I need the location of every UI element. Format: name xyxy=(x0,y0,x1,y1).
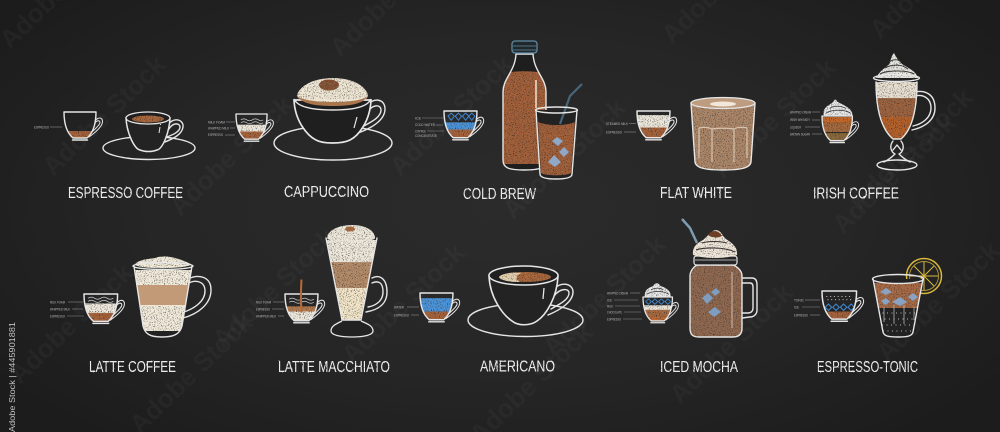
panel: cappuccino xyxy=(208,78,392,201)
icon: glass of cold brew with straw xyxy=(536,84,582,179)
legend: cold brew ingredients: ICE xyxy=(415,116,421,120)
icon: espresso-tonic glass xyxy=(870,274,926,337)
legend: latte macchiato ingredients xyxy=(256,300,284,318)
watermark: Adobe Stock tiled: Adobe Stock xyxy=(163,89,299,221)
watermark: Adobe Stock tiled: Adobe Stock xyxy=(36,49,172,181)
legend: espresso-tonic ingredients: ESPRESSO xyxy=(794,314,808,318)
icon: latte composition cup xyxy=(84,294,124,323)
legend: latte ingredients: WHIPPED MILK xyxy=(50,308,70,312)
legend: latte ingredients xyxy=(50,300,84,318)
icon: iced mocha composition cup xyxy=(643,283,678,323)
legend: iced mocha ingredients xyxy=(607,292,642,322)
legend: espresso-tonic ingredients: TONIC xyxy=(794,298,804,302)
icon: irish coffee glass xyxy=(870,53,935,170)
icon: cappuccino saucer and cup xyxy=(274,78,392,160)
panel: latte coffee xyxy=(50,256,211,376)
icon: irish coffee composition cup xyxy=(822,100,859,143)
legend: iced mocha ingredients: MILK xyxy=(607,304,613,308)
legend: espresso-tonic ingredients xyxy=(794,298,820,318)
panel: flat white xyxy=(606,98,755,202)
legend: espresso ingredients: ESPRESSO xyxy=(34,126,49,130)
icon: cappuccino composition cup xyxy=(236,114,273,141)
watermark: Adobe Stock tiled: Adobe Stock xyxy=(663,277,799,409)
legend: irish coffee ingredients: IRISH WHISKEY xyxy=(790,118,810,122)
label: Cappuccino: CAPPUCCINO xyxy=(284,184,369,201)
legend: americano ingredients xyxy=(394,306,419,318)
legend: flat white ingredients: ESPRESSO xyxy=(606,130,622,134)
icon: macchiato composition cup with pour xyxy=(285,280,325,323)
legend: iced mocha ingredients: WHIPPED CREAM xyxy=(607,292,628,296)
legend: cold brew ingredients xyxy=(415,116,444,138)
label: Latte Coffee: LATTE COFFEE xyxy=(89,359,176,376)
icon: americano composition cup xyxy=(420,293,460,322)
legend: irish coffee ingredients xyxy=(790,110,822,136)
legend: cold brew ingredients: COLD WATER xyxy=(415,123,435,127)
watermark: Adobe Stock tiled: Adobe Stock xyxy=(536,229,672,361)
watermark: Adobe Stock tiled: Adobe Stock xyxy=(335,237,471,369)
panel: iced mocha xyxy=(607,219,757,376)
panel: cold brew xyxy=(415,41,582,203)
watermark: Adobe Stock tiled: Adobe Stock xyxy=(496,92,632,224)
icon: latte macchiato tall glass xyxy=(320,225,387,337)
legend: iced mocha ingredients: ICE xyxy=(607,298,612,302)
legend: americano ingredients: WATER xyxy=(394,306,404,310)
legend: flat white ingredients: STEAMED MILK xyxy=(606,122,628,126)
label: Espresso Coffee: ESPRESSO COFFEE xyxy=(68,185,183,202)
legend: irish coffee ingredients: BROWN SUGAR xyxy=(790,132,810,136)
label: Iced Mocha: ICED MOCHA xyxy=(660,359,738,376)
legend: cappuccino ingredients: WHIPPED MILK xyxy=(208,126,229,130)
legend: flat white ingredients xyxy=(606,122,636,134)
legend: latte macchiato ingredients: MILK FOAM xyxy=(256,300,271,304)
icon: espresso-tonic composition cup xyxy=(822,291,864,321)
panel: espresso-tonic xyxy=(794,258,942,376)
watermark: Adobe Stock tiled: Adobe Stock xyxy=(843,82,979,214)
label: Irish Coffee: IRISH COFFEE xyxy=(813,186,899,202)
legend: espresso-tonic ingredients: ICE xyxy=(794,306,799,310)
icon: espresso saucer and cup xyxy=(103,112,195,160)
legend: americano ingredients: ESPRESSO xyxy=(394,314,409,318)
label: Americano: AMERICANO xyxy=(480,358,555,376)
legend: cold brew ingredients: COFFEE xyxy=(415,130,426,134)
icon: americano saucer and cup xyxy=(468,266,583,336)
label: Latte Macchiato: LATTE MACCHIATO xyxy=(278,359,390,376)
legend: iced mocha ingredients: CHOCOLATE xyxy=(607,310,622,314)
icon: espresso composition cup xyxy=(64,112,103,140)
panel: americano xyxy=(394,266,583,376)
icon: bottle of cold brew xyxy=(502,40,547,171)
legend: cold brew ingredients: CONCENTRATE xyxy=(415,134,437,138)
legend: iced mocha ingredients: ESPRESSO xyxy=(607,318,621,322)
panel: latte macchiato xyxy=(256,225,390,376)
label: Flat White: FLAT WHITE xyxy=(660,185,732,202)
icon: cold brew composition cup xyxy=(444,111,484,140)
legend: latte ingredients: ESPRESSO xyxy=(50,314,65,318)
legend: latte macchiato ingredients: WHIPPED MILK xyxy=(256,314,276,318)
legend: latte ingredients: MILK FOAM xyxy=(50,300,65,304)
icon: flat white composition cup xyxy=(637,111,677,140)
stock image credit: Adobe Stock | #445901881 xyxy=(7,322,17,432)
watermark: Adobe Stock tiled: Adobe Stock xyxy=(383,49,519,181)
legend: latte macchiato ingredients: ESPRESSO xyxy=(256,308,270,312)
legend: irish coffee ingredients: WHIPPED CREAM xyxy=(790,110,811,114)
icon: flat white glass xyxy=(691,98,755,170)
icon: lemon slice xyxy=(906,258,942,294)
icon: latte glass mug xyxy=(130,256,211,337)
legend: cappuccino ingredients: ESPRESSO xyxy=(208,133,223,137)
panel: espresso coffee xyxy=(34,112,195,202)
panel: irish coffee xyxy=(790,53,935,202)
icon: iced mocha mason jar xyxy=(682,219,757,337)
watermark: Adobe Stock tiled: Adobe Stock xyxy=(826,107,962,239)
legend: irish coffee ingredients: LIQUEUR xyxy=(790,126,801,130)
legend: cappuccino ingredients: MILK FOAM xyxy=(208,120,225,124)
legend: cappuccino ingredients xyxy=(208,120,235,137)
watermark: Adobe Stock tiled: Adobe Stock xyxy=(3,257,139,389)
label: Espresso-Tonic: ESPRESSO-TONIC xyxy=(817,359,918,376)
watermark: Adobe Stock tiled: Adobe Stock xyxy=(206,222,342,354)
watermark: Adobe Stock tiled: Adobe Stock xyxy=(706,52,842,184)
label: Cold Brew: COLD BREW xyxy=(463,186,537,203)
